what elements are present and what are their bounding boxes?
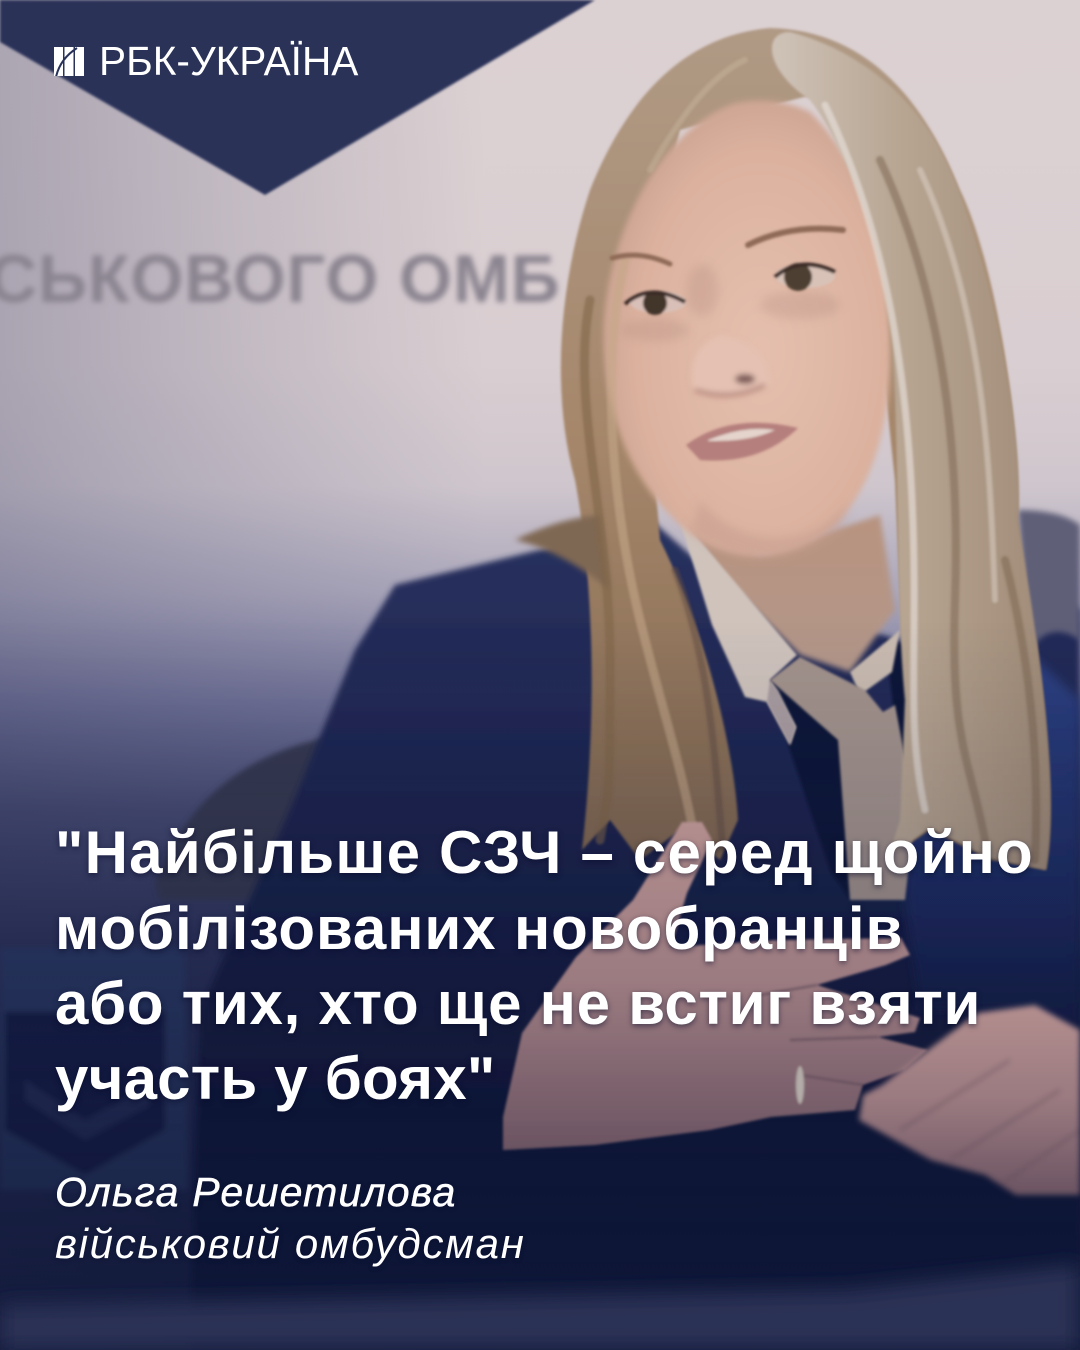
hair strands	[584, 60, 1036, 860]
neck	[680, 510, 895, 672]
under-eye shadows	[621, 264, 840, 342]
blazer	[190, 510, 1080, 1350]
table top	[0, 1265, 1080, 1350]
speaker name: Ольга Решетилова	[55, 1169, 457, 1215]
shirt collar left	[678, 515, 797, 745]
wedding ring	[796, 1066, 804, 1104]
hair back	[561, 28, 1050, 870]
logo wordmark: РБК-УКРАЇНА	[99, 38, 358, 84]
hair highlights right	[772, 32, 1050, 870]
face	[604, 100, 890, 556]
hair on right shoulder	[1018, 510, 1080, 650]
dark shirt	[770, 640, 930, 900]
resting hand	[859, 1005, 1080, 1195]
headline quote: мобілізованих новобранців	[55, 895, 903, 962]
logo: РБК-Україна	[54, 38, 358, 84]
blurred wall emblem	[0, 0, 595, 195]
eyebrows	[612, 229, 843, 264]
nose	[692, 335, 770, 395]
headline quote	[55, 819, 1034, 1114]
attribution	[55, 1169, 526, 1267]
right lapel	[905, 640, 1080, 1060]
tie	[770, 657, 915, 900]
shirt collar right	[850, 630, 900, 695]
mouth	[686, 423, 798, 461]
gesturing hand	[503, 822, 928, 1150]
hair on left shoulder	[515, 515, 610, 590]
headline quote: "Найбільше СЗЧ – серед щойно	[55, 819, 1034, 886]
headline quote: або тих, хто ще не встиг взяти	[55, 970, 981, 1037]
eyes	[625, 263, 835, 315]
speaker role: військовий омбудсман	[55, 1220, 526, 1267]
mug on the table	[0, 948, 188, 1190]
finger gaps	[760, 985, 878, 1085]
chin shadow	[690, 500, 850, 558]
headline quote: участь у боях"	[55, 1045, 495, 1112]
logo icon	[54, 47, 84, 76]
collar fold	[767, 680, 796, 745]
finger gaps right	[900, 1060, 1080, 1185]
chair	[155, 738, 325, 900]
blurred wall lettering: СЬКОВОГО ОМБ	[0, 241, 561, 317]
lower shade	[0, 620, 1080, 1350]
